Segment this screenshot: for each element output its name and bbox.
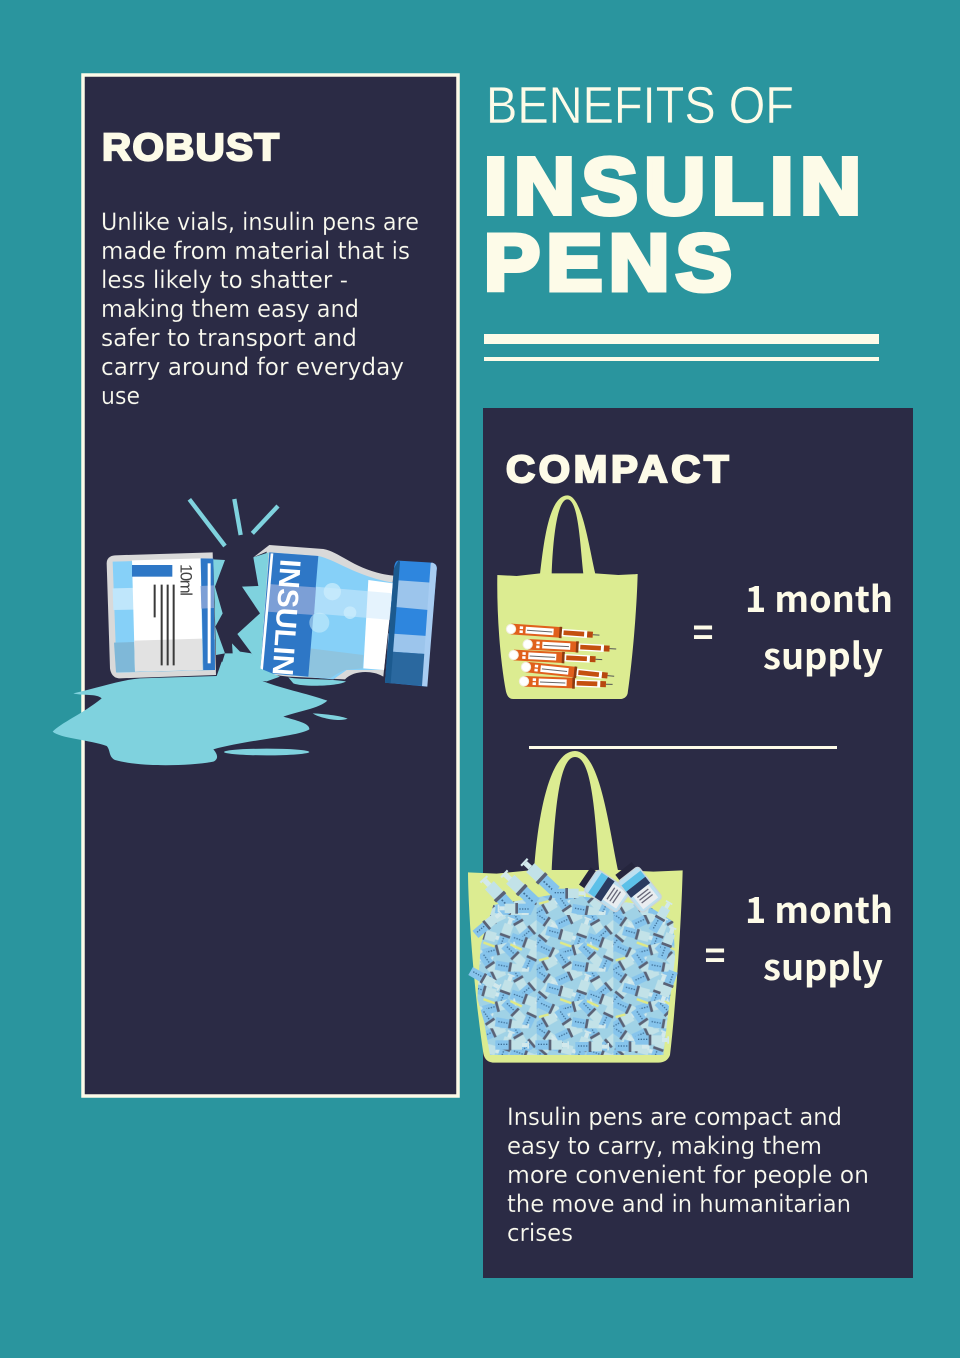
divider [529,746,837,749]
heading: robust: ROBUST [102,127,279,169]
insulin pens [506,623,617,690]
text block: robust description: Unlike vials, insulin pens are [101,208,419,236]
text block: compact description: Insulin pens are compact and [507,1103,842,1131]
cap [385,561,437,687]
label: 1 month supply, pens [745,571,893,680]
spilled liquid [53,662,327,765]
text block: compact description [507,1103,869,1247]
right vial fragment: INSULIN [266,558,307,677]
title double rule [484,334,879,361]
left vial fragment: 10ml [176,564,195,596]
panel: compact [468,408,913,1278]
label: 1 month supply, vials [745,882,893,991]
crack lines [189,499,278,546]
title line: pens: PENS [484,219,732,308]
equals sign 1: = [692,611,714,652]
heading: compact: COMPACT [506,449,729,491]
text block: compact description: more convenient for people on [507,1161,869,1189]
vials [578,861,663,913]
panel: robust [83,75,458,1096]
label: 1 month supply, pens: 1 month [745,571,893,623]
title line: insulin: INSULIN [484,142,861,231]
text block: robust description [101,208,419,410]
text block: compact description: the move and in humanitarian [507,1190,851,1218]
text block: robust description: less likely to shatter - [101,266,348,294]
icon: tote bag full of syringes and vials [468,751,683,1063]
text block: robust description: carry around for everyday [101,353,404,381]
text block: compact description: easy to carry, making them [507,1132,822,1160]
text block: robust description: made from material that is [101,237,410,265]
right vial fragment [217,545,437,687]
label: 1 month supply, vials: supply [763,939,883,991]
text block: robust description: making them easy and [101,295,359,323]
text block: robust description: use [101,382,140,410]
label: 1 month supply, vials: 1 month [745,882,893,934]
icon: broken insulin vial with spill [53,499,437,765]
label: 1 month supply, pens: supply [763,628,883,680]
equals sign 2: = [704,934,726,975]
title [484,77,861,308]
left vial fragment [107,552,225,678]
icon: tote bag with insulin pens [497,495,638,699]
text block: compact description: crises [507,1219,573,1247]
syringe pile [477,893,675,1055]
text block: robust description: safer to transport and [101,324,357,352]
title line: benefits of: BENEFITS OF [486,77,794,135]
